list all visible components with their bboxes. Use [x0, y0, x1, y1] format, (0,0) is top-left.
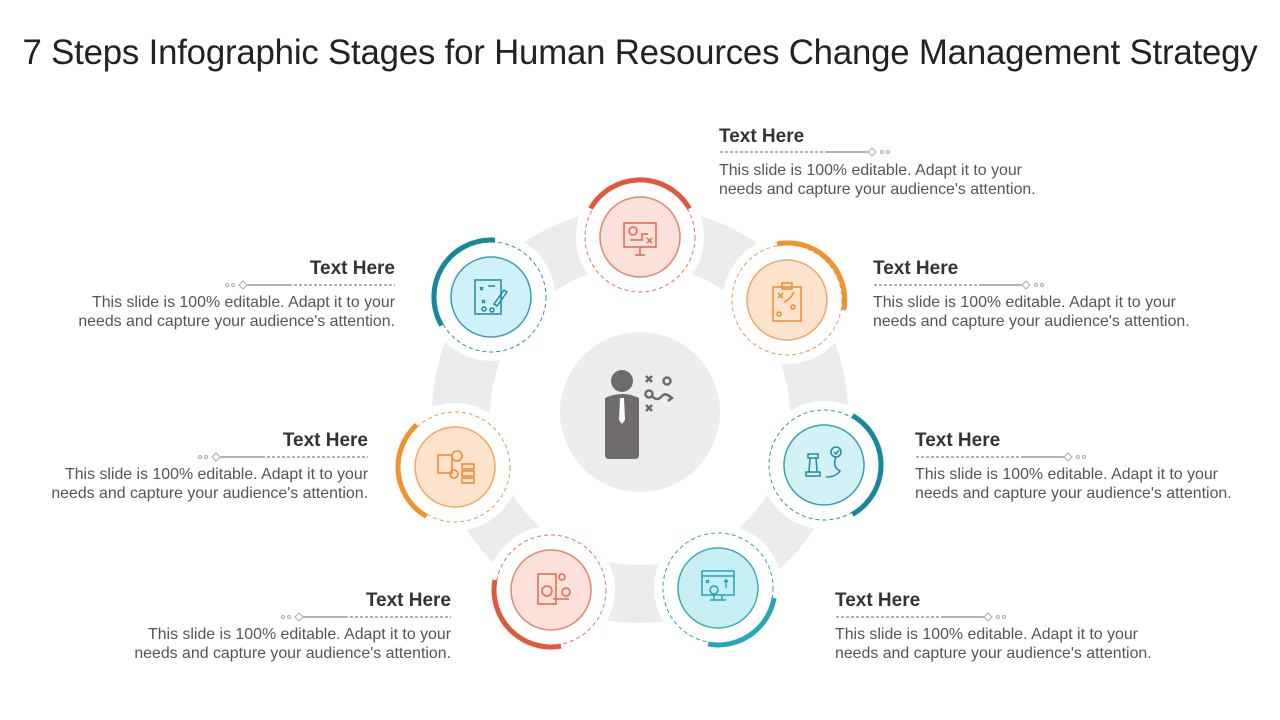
text block: lower right: Text Here	[835, 590, 920, 611]
text block: right: Text Here	[915, 430, 1000, 451]
text block: lower left	[134, 590, 451, 662]
node: upper right	[732, 243, 845, 355]
icon: process gears	[438, 451, 474, 483]
text block: lower right	[835, 590, 1152, 662]
text block: upper right: This slide is 100% editable. Adapt it to your needs and capture your audience's attention.	[873, 294, 1190, 330]
node: top	[585, 180, 695, 292]
text block: top: This slide is 100% editable. Adapt it to your needs and capture your audience's attention.	[719, 162, 1036, 198]
text block: upper right	[873, 258, 1190, 330]
text block: upper right: Text Here	[873, 258, 958, 279]
icon: chess rook	[806, 447, 841, 477]
icon: report	[538, 574, 570, 604]
node: lower right	[663, 533, 774, 645]
node: left	[398, 412, 510, 522]
center circle	[560, 332, 720, 492]
text block: left: Text Here	[283, 430, 368, 451]
node halos	[391, 173, 888, 654]
text block: upper left: This slide is 100% editable. Adapt it to your needs and capture your audience's attention.	[78, 294, 395, 330]
text block: upper left: Text Here	[310, 258, 395, 279]
text block: upper left	[78, 258, 395, 330]
text block: right: This slide is 100% editable. Adapt it to your needs and capture your audience's attention.	[915, 466, 1232, 502]
icon: monitor strategy	[702, 571, 734, 600]
icon: clipboard	[773, 283, 801, 321]
icon: businessman strategy	[605, 370, 672, 459]
text block: left	[51, 430, 368, 502]
text block: lower left: Text Here	[366, 590, 451, 611]
text block: top: Text Here	[719, 126, 804, 147]
text block: lower left: This slide is 100% editable. Adapt it to your needs and capture your audience's attention.	[134, 626, 451, 662]
text block: left: This slide is 100% editable. Adapt it to your needs and capture your audience's attention.	[51, 466, 368, 502]
node: right	[769, 410, 881, 520]
icon: presentation board	[624, 223, 656, 255]
icon: game plan paper	[475, 280, 507, 314]
dividers with diamonds	[198, 148, 1086, 621]
gray band ring	[462, 237, 818, 593]
text block: right	[915, 430, 1232, 502]
text block: top	[719, 126, 1036, 198]
title: 7 Steps Infographic Stages for Human Resources Change Management Strategy	[23, 33, 1257, 72]
text block: lower right: This slide is 100% editable. Adapt it to your needs and capture your audience's attention.	[835, 626, 1152, 662]
node: lower left	[494, 535, 606, 647]
node: upper left	[434, 240, 546, 352]
